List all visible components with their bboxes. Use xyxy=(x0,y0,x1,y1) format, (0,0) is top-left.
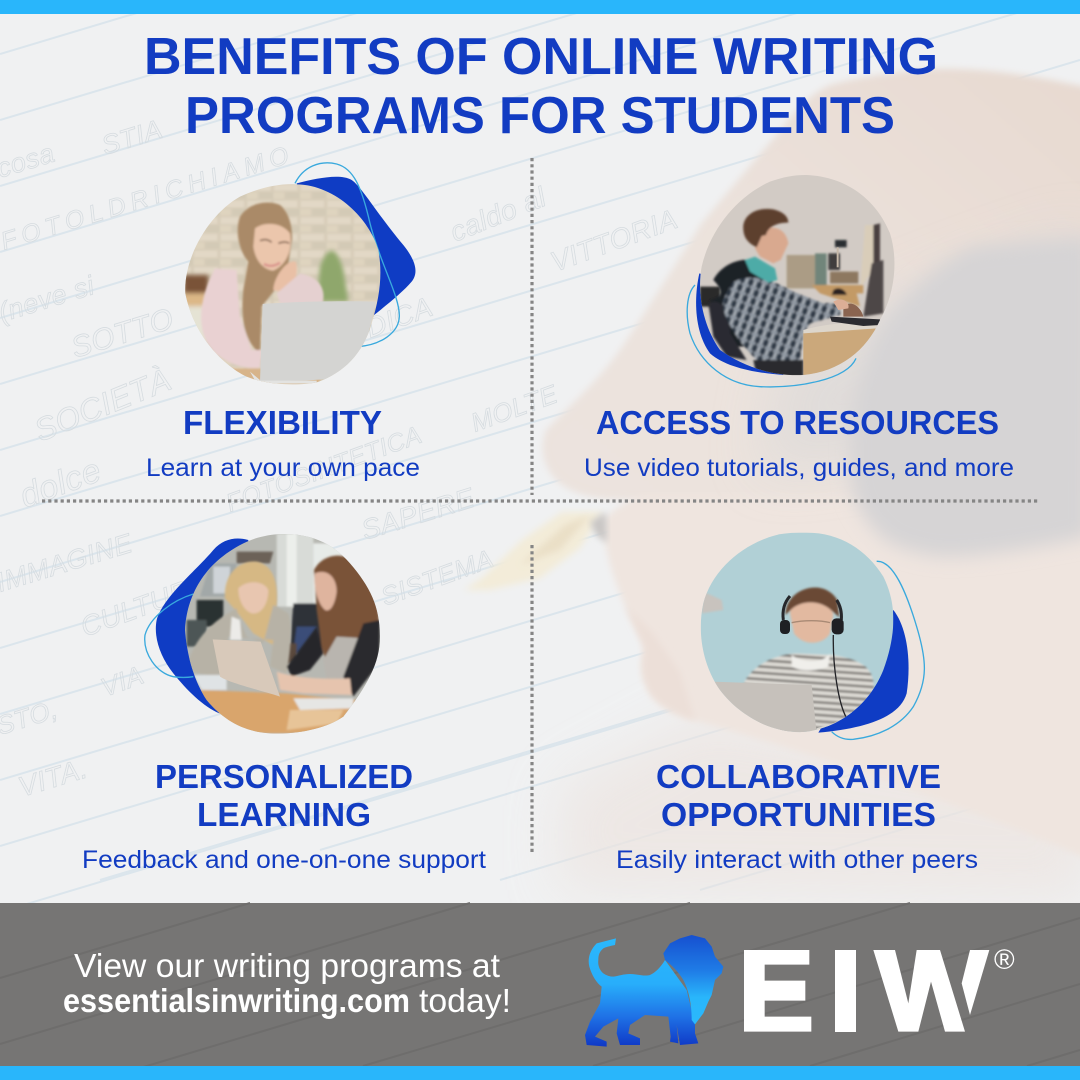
title xyxy=(144,28,938,145)
footer band xyxy=(0,903,1080,1080)
heading: OPPORTUNITIES xyxy=(661,796,936,833)
handwriting traces: SOTTO xyxy=(67,302,178,365)
hand holding pen, faded xyxy=(543,69,1080,900)
description: Use video tutorials, guides, and more xyxy=(584,454,1014,482)
heading: LEARNING xyxy=(197,796,371,833)
top accent bar xyxy=(0,0,1080,14)
heading xyxy=(656,758,941,833)
dotted dividers xyxy=(42,158,1038,852)
icon: photo of student at desk xyxy=(687,170,900,387)
handwriting traces: VITTORIA xyxy=(546,203,682,278)
handwriting traces: VIA xyxy=(97,660,148,703)
panel: flexibility xyxy=(146,163,420,482)
title: PROGRAMS FOR STUDENTS xyxy=(185,87,895,145)
call to action text: View our writing programs at xyxy=(74,947,500,984)
icon: photo of student with headphones xyxy=(693,527,924,740)
handwriting traces: caldo al xyxy=(446,181,551,248)
handwriting traces: dolce xyxy=(15,451,106,516)
icon: photo of tutor and student xyxy=(145,530,387,740)
logo: lion xyxy=(585,935,723,1047)
handwriting traces: CULTURA xyxy=(76,568,213,643)
handwriting traces: SISTEMA xyxy=(377,543,498,612)
call to action text: essentialsinwriting.com xyxy=(63,982,410,1019)
heading xyxy=(155,758,413,833)
panel: personalized learning xyxy=(82,530,486,874)
handwriting traces xyxy=(0,114,682,803)
pen nib xyxy=(464,512,607,590)
description: Learn at your own pace xyxy=(146,454,420,482)
handwriting traces: SOCIETÀ xyxy=(29,361,176,448)
handwriting traces: SAPERE xyxy=(358,482,478,546)
handwriting traces: DICA xyxy=(361,291,437,344)
call to action text xyxy=(63,947,511,1019)
handwriting traces: STIA xyxy=(98,114,166,161)
call to action text: today! xyxy=(419,982,511,1019)
description: Easily interact with other peers xyxy=(616,846,978,874)
logo: EIW wordmark xyxy=(744,950,989,1032)
bottom accent bar xyxy=(0,1066,1080,1080)
heading: ACCESS TO RESOURCES xyxy=(596,404,999,441)
heading: COLLABORATIVE xyxy=(656,758,941,795)
panel: collaborative opportunities xyxy=(616,527,978,874)
handwriting traces: VITA. xyxy=(15,752,91,803)
logo: registered mark: ® xyxy=(994,944,1015,975)
handwriting traces: FOTOLDRICHIAMO xyxy=(0,141,293,256)
handwriting traces: FOTOSINTETICA xyxy=(222,421,426,518)
icon: photo of student with laptop xyxy=(173,163,415,390)
description: Feedback and one-on-one support xyxy=(82,846,486,874)
heading: FLEXIBILITY xyxy=(183,404,382,441)
panel: access to resources xyxy=(584,170,1014,482)
handwriting traces: MOLTE xyxy=(467,379,562,438)
title: BENEFITS OF ONLINE WRITING xyxy=(144,28,938,86)
heading: PERSONALIZED xyxy=(155,758,413,795)
